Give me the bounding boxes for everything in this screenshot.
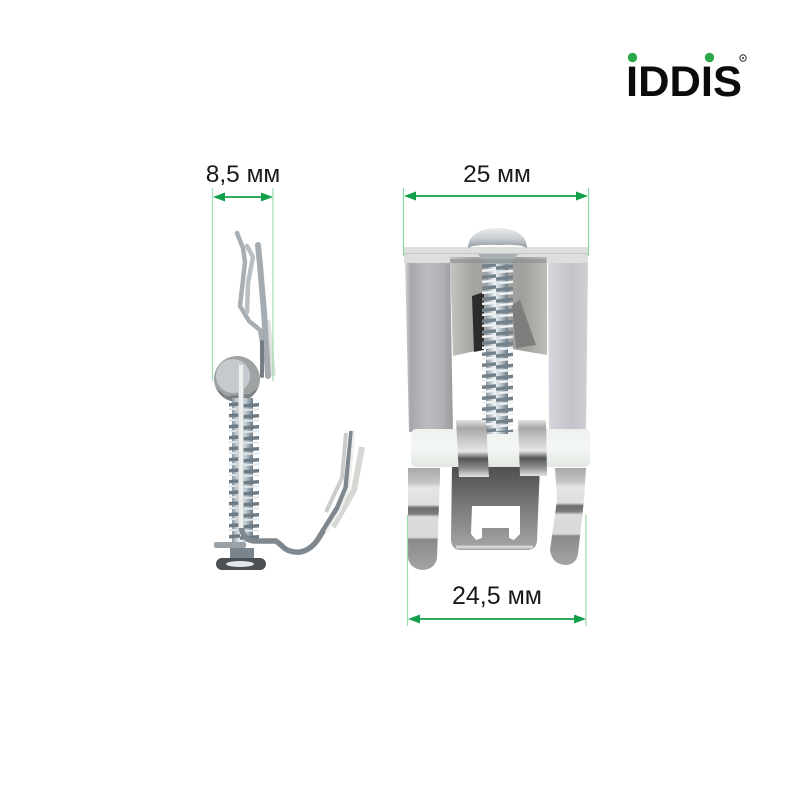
- clip bracket: [241, 365, 362, 552]
- left strap: [405, 258, 453, 432]
- washer and screw head: [214, 542, 246, 548]
- left foot: [408, 468, 440, 570]
- front view of the clip: [404, 228, 590, 570]
- dimension: 24,5 мм: 24,5 мм: [452, 582, 542, 610]
- right strap: [548, 258, 588, 432]
- dimension: 24,5 мм: [408, 514, 586, 626]
- logo: IDDIS: IDDIS: [626, 58, 742, 106]
- roller: [411, 429, 590, 467]
- inner bracket: [450, 257, 547, 356]
- dimension: 25 мм: 25 мм: [463, 161, 531, 188]
- right foot: [550, 468, 586, 565]
- dimension: 8,5 мм: 8,5 мм: [206, 161, 280, 188]
- lower plate: [451, 465, 540, 550]
- left roller clip: [456, 420, 489, 477]
- side view of the clip: [214, 233, 362, 570]
- upper spring tabs: [237, 233, 272, 376]
- top plate: [404, 247, 588, 263]
- screw shaft: [232, 398, 253, 542]
- right roller clip: [518, 420, 547, 476]
- bracket shadow: [472, 292, 484, 352]
- screw head seen from the end: [214, 356, 260, 402]
- plate slot: [471, 506, 520, 540]
- screw: [450, 228, 546, 434]
- dimension: 25 мм: [404, 161, 588, 256]
- dimension: 8,5 мм: [206, 161, 280, 381]
